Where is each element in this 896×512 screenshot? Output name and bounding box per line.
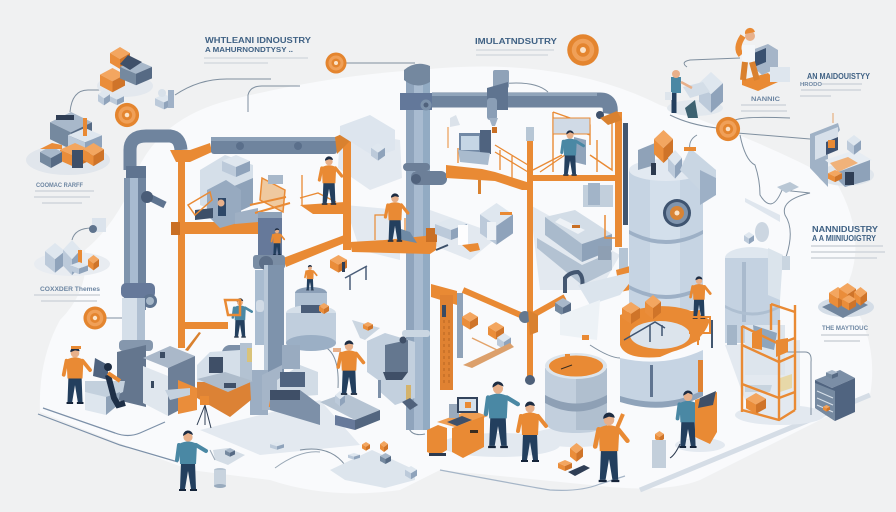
text block: nannic: NANNIC xyxy=(751,97,781,103)
small orange control table xyxy=(330,255,367,290)
title block center xyxy=(475,36,557,56)
orange frame left xyxy=(170,138,351,351)
server rack xyxy=(815,370,855,421)
top beam xyxy=(432,93,610,119)
worker on left platform xyxy=(300,156,345,214)
machine: small valve xyxy=(155,89,174,109)
text block: commerce xyxy=(34,182,94,204)
icon: orange gear left xyxy=(115,103,139,127)
round orange platform xyxy=(620,276,712,358)
factory floor xyxy=(40,67,872,493)
kiosk orange desk xyxy=(427,397,488,458)
machines behind central column xyxy=(340,115,513,252)
title block center: IMULATNDSUTRY xyxy=(475,36,557,46)
worker and machine top right xyxy=(738,28,790,91)
machine cluster: top left orange crates xyxy=(97,47,153,105)
small gray post xyxy=(652,431,680,468)
big tank xyxy=(629,159,703,310)
title block left: A MAHURNONDTYSY .. xyxy=(205,45,293,54)
text block: nanindustry: A A MIINIUOIGTRY xyxy=(812,234,877,243)
middle tower xyxy=(250,212,285,415)
text block: the maytiouc xyxy=(821,325,869,342)
worker with panel xyxy=(553,118,590,175)
icon: gear lower left xyxy=(83,306,107,330)
text block: top right: HRODO xyxy=(800,82,822,88)
slab machine bottom center xyxy=(330,441,417,488)
icon: gear right xyxy=(716,117,740,141)
workbench and worker xyxy=(320,340,380,430)
orange unit bottom xyxy=(558,443,590,476)
worker orange center xyxy=(518,401,546,461)
central column xyxy=(400,64,447,430)
hanging actuator xyxy=(487,70,509,133)
worker teal center xyxy=(486,382,518,447)
machine atop tank xyxy=(638,130,716,205)
main pipe column xyxy=(119,136,181,351)
orange L structure and robot arm xyxy=(431,270,640,390)
worker orange right xyxy=(595,413,627,481)
monitor machine and orange desk xyxy=(197,350,253,428)
connector wires xyxy=(70,58,811,465)
title block left xyxy=(204,35,311,64)
orange drum xyxy=(545,353,607,433)
machine: control panel on column xyxy=(352,320,418,410)
icon: gear top left xyxy=(326,52,346,74)
machine: workstation center left xyxy=(262,345,320,425)
machine cluster: left press station xyxy=(26,112,110,175)
small tablet xyxy=(777,182,799,193)
lower tank xyxy=(620,350,703,408)
tank under worker xyxy=(286,265,336,351)
icon: gear top center xyxy=(567,34,599,66)
title block left: WHTLEANI IDNOUSTRY xyxy=(205,35,311,45)
worker and machine second xyxy=(665,70,723,118)
text block: top right xyxy=(800,72,871,97)
worker teal bottom left xyxy=(177,430,206,490)
machine: base blocks xyxy=(117,345,197,416)
orange crates on conveyor xyxy=(462,312,514,368)
long bench machine right xyxy=(537,183,618,285)
floor shadows xyxy=(200,130,825,457)
text block: cooxder: COXXDER Themes xyxy=(40,286,100,293)
text block: nanindustry: NANNIDUSTRY xyxy=(812,225,879,234)
text block: nannic xyxy=(741,97,787,112)
beam left xyxy=(211,130,351,154)
orange leg unit right xyxy=(616,248,630,292)
text block: top right: AN MAIDOUISTYY xyxy=(807,72,871,81)
small items bottom left xyxy=(210,442,320,488)
worker at desk left xyxy=(64,346,125,415)
orange rack xyxy=(742,304,795,420)
text block: cooxder xyxy=(34,286,100,302)
storage stack xyxy=(744,198,790,270)
worker on press xyxy=(222,298,252,381)
worker at kiosk right xyxy=(678,390,717,447)
monitor station on platform xyxy=(448,115,491,165)
text block: the maytiouc: THE MAYTIOUC xyxy=(822,325,868,332)
orange platform center xyxy=(446,111,628,385)
text block: commerce: COOMAC RARFF xyxy=(36,182,83,189)
central machine left xyxy=(188,155,290,228)
orange crates right xyxy=(818,283,874,318)
orange platform worker center xyxy=(350,193,448,254)
machine: right station xyxy=(810,113,874,187)
machine cluster: storage xyxy=(34,218,110,276)
text block: nanindustry xyxy=(811,225,885,259)
tank two xyxy=(725,247,783,345)
floor edge lines xyxy=(38,395,870,490)
